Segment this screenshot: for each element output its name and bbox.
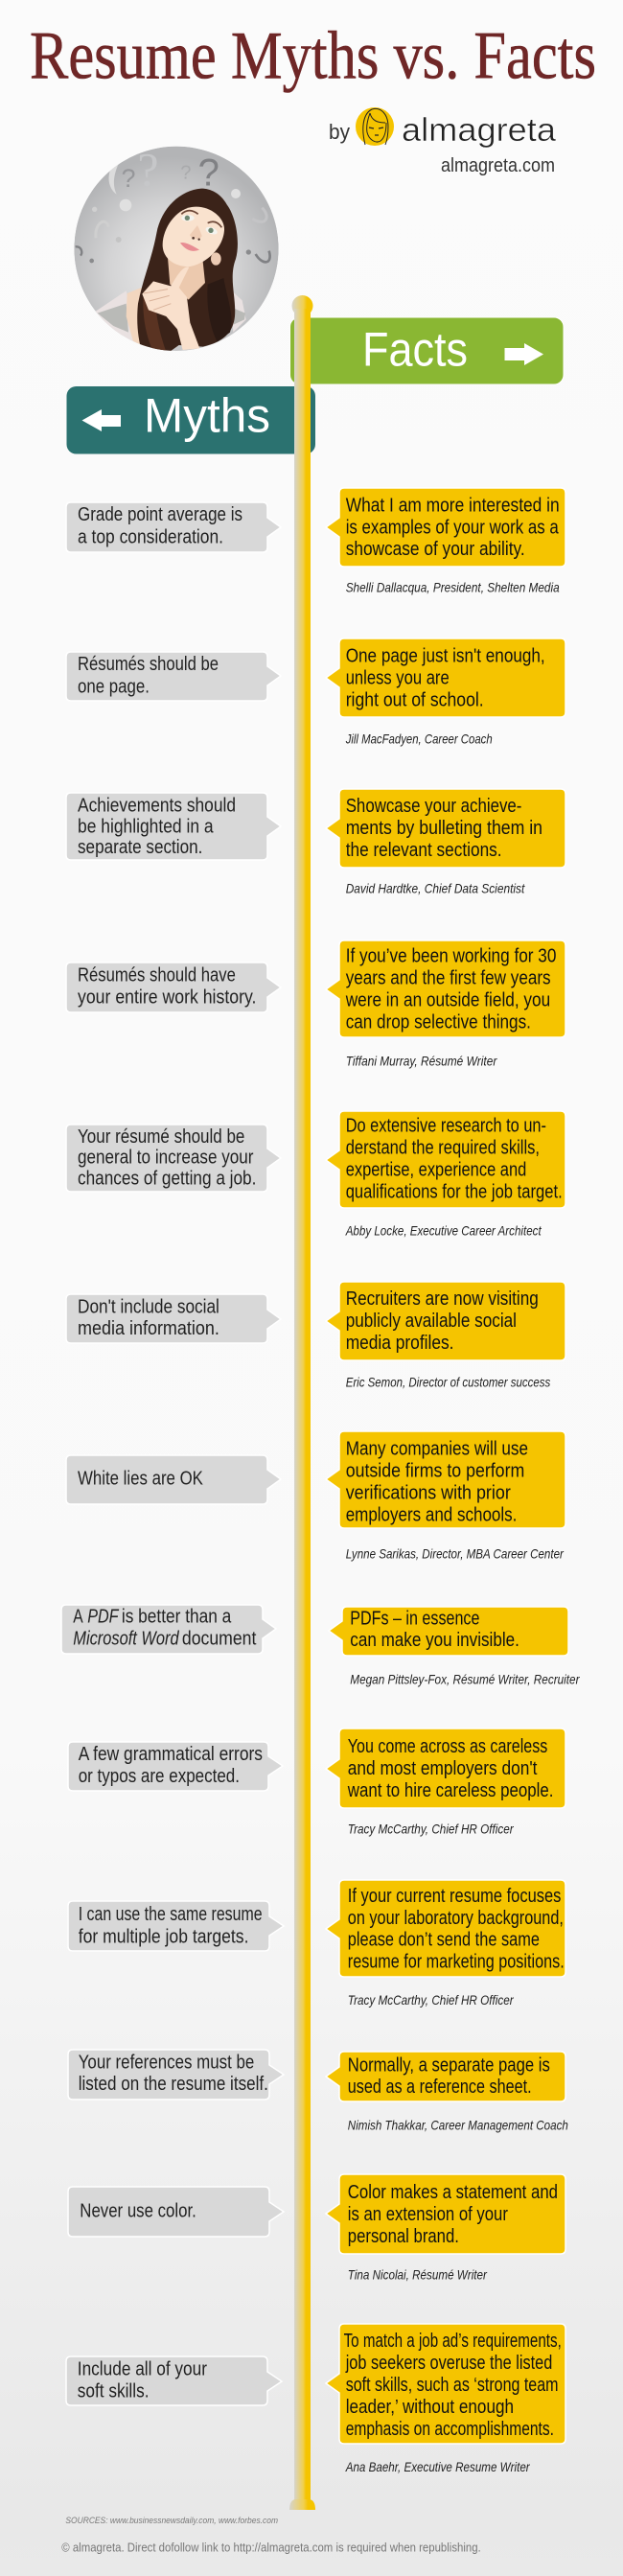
attribution 10: Tracy McCarthy, Chief HR Officer bbox=[348, 1992, 515, 2007]
fact bubble 10: resume for marketing positions. bbox=[348, 1952, 565, 1973]
fact bubble 13: leader,’ without enough bbox=[346, 2397, 514, 2418]
fact bubble 10: on your laboratory background, bbox=[348, 1908, 564, 1929]
sources: SOURCES: www.businessnewsdaily.com, www.forbes.com bbox=[65, 2516, 278, 2526]
fact bubble 4: were in an outside field, you bbox=[345, 989, 550, 1010]
myth bubble 13 bbox=[66, 2356, 282, 2405]
hand bbox=[142, 267, 199, 350]
photo: thinking woman with question marks: ? bbox=[198, 151, 219, 194]
myth bubble 2: Résumés should be bbox=[78, 654, 219, 675]
fact bubble 11: Normally, a separate page is bbox=[348, 2054, 550, 2076]
myths label: Myths bbox=[144, 389, 270, 443]
myth bubble 4: your entire work history. bbox=[78, 987, 256, 1009]
myth bubble 5 bbox=[66, 1125, 281, 1192]
myth bubble 10 bbox=[68, 1901, 284, 1951]
myth bubble 9 bbox=[68, 1742, 283, 1791]
fact bubble 5: qualifications for the job target. bbox=[346, 1181, 563, 1202]
fact bubble 9: You come across as careless bbox=[348, 1736, 547, 1757]
arrow: right bbox=[504, 343, 543, 365]
row 12 bbox=[68, 2174, 565, 2283]
fact bubble 2: One page just isn't enough, bbox=[346, 646, 545, 667]
facts label: Facts bbox=[362, 323, 468, 377]
myth bubble 8: Microsoft Word bbox=[73, 1629, 179, 1650]
fact bubble 5: derstand the required skills, bbox=[346, 1137, 540, 1158]
myth bubble 3 bbox=[66, 793, 281, 860]
fact bubble 6: publicly available social bbox=[346, 1311, 517, 1332]
fact bubble 7: verifications with prior bbox=[346, 1482, 511, 1503]
fact bubble 10: If your current resume focuses bbox=[348, 1886, 561, 1907]
row 13 bbox=[66, 2324, 565, 2474]
fact bubble 9: want to hire careless people. bbox=[347, 1780, 554, 1801]
myth bubble 2 bbox=[66, 652, 281, 701]
fact bubble 1: showcase of your ability. bbox=[346, 539, 525, 560]
fact bubble 12 bbox=[326, 2174, 565, 2254]
myth bubble 13: Include all of your bbox=[78, 2358, 207, 2379]
attribution 3: David Hardtke, Chief Data Scientist bbox=[346, 881, 525, 896]
attribution 5: Abby Locke, Executive Career Architect bbox=[345, 1223, 542, 1239]
fact bubble 1: is examples of your work as a bbox=[346, 517, 559, 538]
myth bubble 3: separate section. bbox=[78, 837, 202, 858]
fact bubble 13: To match a job ad’s requirements, bbox=[344, 2331, 562, 2352]
fact bubble 8 bbox=[329, 1607, 568, 1656]
row 10 bbox=[68, 1880, 565, 2007]
by label: by bbox=[329, 120, 350, 144]
fact bubble 13: soft skills, such as ‘strong team bbox=[346, 2375, 558, 2396]
fact bubble 5 bbox=[326, 1111, 565, 1208]
row 8 bbox=[61, 1605, 581, 1686]
myth bubble 5: Your résumé should be bbox=[78, 1126, 244, 1148]
row 9 bbox=[68, 1729, 565, 1837]
hair bbox=[137, 189, 238, 353]
photo: thinking woman with question marks: ? bbox=[137, 142, 159, 196]
attribution 2: Jill MacFadyen, Career Coach bbox=[345, 731, 493, 746]
myth bubble 8: PDF bbox=[87, 1607, 120, 1628]
attribution 13: Ana Baehr, Executive Resume Writer bbox=[345, 2459, 531, 2474]
myth bubble 6 bbox=[66, 1294, 281, 1343]
fact bubble 7: outside firms to perform bbox=[346, 1460, 524, 1481]
fact bubble 3 bbox=[326, 789, 565, 868]
myth bubble 8 bbox=[61, 1605, 276, 1654]
row 2 bbox=[66, 638, 565, 746]
face bbox=[163, 207, 224, 267]
fact bubble 12: is an extension of your bbox=[348, 2204, 508, 2225]
attribution 8: Megan Pittsley-Fox, Résumé Writer, Recruiter bbox=[350, 1671, 581, 1686]
fact bubble 4 bbox=[326, 940, 565, 1037]
myth bubble 6: Don't include social bbox=[78, 1296, 219, 1317]
fact bubble 10: please don’t send the same bbox=[348, 1930, 540, 1951]
fact bubble 9 bbox=[326, 1729, 565, 1808]
fact bubble 11: used as a reference sheet. bbox=[348, 2077, 532, 2098]
myth bubble 1 bbox=[66, 502, 281, 552]
attribution 9: Tracy McCarthy, Chief HR Officer bbox=[348, 1822, 515, 1837]
fact bubble 3: ments by bulleting them in bbox=[346, 818, 542, 839]
fact bubble 2 bbox=[326, 638, 565, 717]
myth bubble 13: soft skills. bbox=[78, 2380, 150, 2402]
fact bubble 7 bbox=[326, 1431, 565, 1528]
fact bubble 3: Showcase your achieve- bbox=[346, 796, 521, 817]
myth bubble 10: I can use the same resume bbox=[79, 1904, 263, 1925]
photo: thinking woman with question marks: ? bbox=[122, 164, 135, 193]
fact bubble 13: emphasis on accomplishments. bbox=[346, 2419, 554, 2440]
fact bubble 4: years and the first few years bbox=[346, 967, 551, 988]
signpost pole bbox=[289, 295, 315, 2510]
fact bubble 13 bbox=[326, 2324, 565, 2444]
myth bubble 11: Your references must be bbox=[79, 2053, 254, 2074]
myth bubble 12 bbox=[68, 2187, 284, 2237]
photo: thinking woman with question marks bbox=[74, 142, 279, 355]
fact bubble 12: personal brand. bbox=[348, 2226, 459, 2247]
myth bubble 3: Achievements should bbox=[78, 795, 236, 816]
fact bubble 4: can drop selective things. bbox=[346, 1011, 531, 1033]
skin chest bbox=[127, 288, 146, 347]
brand: by almagreta logo bbox=[329, 107, 556, 176]
row 4 bbox=[66, 940, 565, 1068]
myths sign bbox=[67, 386, 315, 454]
fact bubble 1: What I am more interested in bbox=[346, 495, 560, 516]
fact bubble 3: the relevant sections. bbox=[346, 840, 502, 861]
attribution 12: Tina Nicolai, Résumé Writer bbox=[348, 2267, 488, 2283]
myth bubble 7 bbox=[66, 1455, 281, 1504]
myth bubble 1: a top consideration. bbox=[78, 527, 223, 548]
myth bubble 5: general to increase your bbox=[78, 1148, 254, 1169]
wordmark: almagreta bbox=[402, 112, 556, 149]
attribution 11: Nimish Thakkar, Career Management Coach bbox=[348, 2118, 568, 2133]
fact bubble 9: and most employers don't bbox=[348, 1758, 538, 1779]
row 1 bbox=[66, 488, 565, 595]
myth bubble 8: A bbox=[73, 1607, 83, 1628]
row 3 bbox=[66, 789, 565, 896]
fact bubble 6 bbox=[326, 1282, 565, 1360]
myth bubble 12: Never use color. bbox=[80, 2200, 196, 2221]
row 11 bbox=[68, 2050, 568, 2133]
fact bubble 8: PDFs – in essence bbox=[350, 1608, 479, 1629]
myth bubble 1: Grade point average is bbox=[78, 504, 242, 525]
attribution 7: Lynne Sarikas, Director, MBA Career Center bbox=[346, 1545, 565, 1561]
photo: thinking woman with question marks: ? bbox=[180, 163, 191, 184]
myth bubble 6: media information. bbox=[78, 1318, 219, 1339]
myth bubble 3: be highlighted in a bbox=[78, 816, 214, 837]
myth bubble 8: document bbox=[182, 1629, 257, 1650]
fact bubble 5: Do extensive research to un- bbox=[346, 1115, 546, 1136]
fact bubble 6: Recruiters are now visiting bbox=[346, 1288, 539, 1310]
row 6 bbox=[66, 1282, 565, 1389]
fact bubble 10 bbox=[326, 1880, 565, 1977]
fact bubble 12: Color makes a statement and bbox=[348, 2182, 558, 2203]
shirt bbox=[96, 291, 246, 341]
fact bubble 11 bbox=[326, 2052, 565, 2101]
myth bubble 7: White lies are OK bbox=[78, 1468, 203, 1489]
facts sign bbox=[289, 317, 564, 384]
fact bubble 2: unless you are bbox=[346, 668, 450, 689]
attribution 1: Shelli Dallacqua, President, Shelten Media bbox=[346, 580, 560, 595]
myth bubble 8: is better than a bbox=[122, 1607, 232, 1628]
fact bubble 7: employers and schools. bbox=[346, 1504, 517, 1525]
fact bubble 4: If you’ve been working for 30 bbox=[346, 945, 556, 966]
row 7 bbox=[66, 1431, 565, 1561]
fact bubble 13: job seekers overuse the listed bbox=[345, 2353, 552, 2374]
myth bubble 4: Résumés should have bbox=[78, 964, 236, 986]
myth bubble 9: A few grammatical errors bbox=[79, 1744, 263, 1765]
fact bubble 6: media profiles. bbox=[346, 1333, 454, 1354]
myth bubble 5: chances of getting a job. bbox=[78, 1169, 256, 1190]
myth bubble 11 bbox=[68, 2050, 284, 2100]
myth bubble 2: one page. bbox=[78, 676, 150, 697]
icon: almagreta face logo bbox=[356, 107, 394, 146]
fact bubble 2: right out of school. bbox=[346, 689, 484, 710]
fact bubble 7: Many companies will use bbox=[346, 1438, 528, 1459]
row 5 bbox=[66, 1111, 565, 1239]
myth bubble 4 bbox=[66, 963, 281, 1012]
neck bbox=[168, 257, 205, 300]
myth bubble 10: for multiple job targets. bbox=[79, 1926, 249, 1947]
arrow: left bbox=[82, 409, 121, 431]
fact bubble 1 bbox=[326, 488, 565, 567]
attribution 4: Tiffani Murray, Résumé Writer bbox=[346, 1053, 497, 1068]
myth bubble 11: listed on the resume itself. bbox=[79, 2074, 268, 2095]
fact bubble 8: can make you invisible. bbox=[350, 1630, 519, 1651]
copyright footer: © almagreta. Direct dofollow link to http://almagreta.com is required when republishing. bbox=[61, 2541, 481, 2555]
myth bubble 9: or typos are expected. bbox=[79, 1766, 240, 1787]
attribution 6: Eric Semon, Director of customer success bbox=[346, 1374, 550, 1389]
fact bubble 5: expertise, experience and bbox=[346, 1159, 526, 1180]
website: almagreta.com bbox=[441, 155, 555, 176]
